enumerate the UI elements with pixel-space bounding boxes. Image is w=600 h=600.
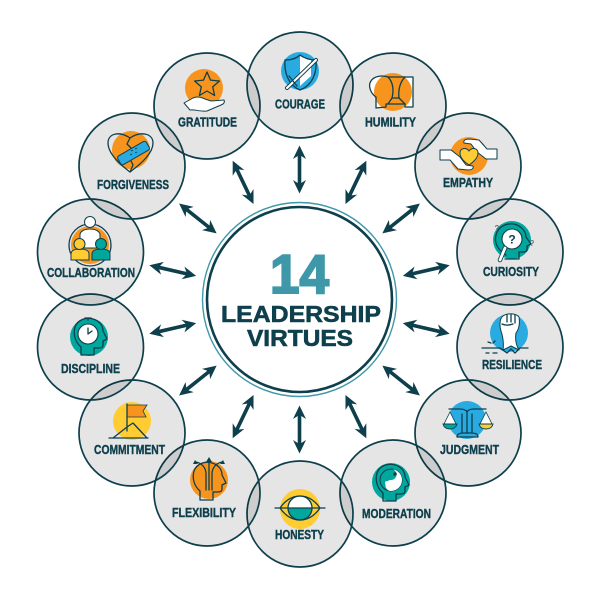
title number: 14 [270,243,329,305]
icon: raised fist from water [482,314,528,353]
icon: three people [69,216,111,266]
label: empathy: EMPATHY [443,175,493,190]
icon: hands holding heart [440,137,497,175]
panel: courage [247,32,353,138]
panel: judgment [415,380,521,486]
icon: head with yin yang [372,463,410,501]
panel: honesty [247,461,353,567]
panel: moderation [340,440,446,546]
panel: humility [340,53,446,159]
icon: star over hand [184,69,224,111]
icon: head with clock [70,318,108,356]
label: collaboration: COLLABORATION [47,265,135,280]
label: honesty: HONESTY [275,527,324,542]
icon: head with arrows [190,457,228,500]
title: leadership virtues: VIRTUES [247,325,353,351]
icon: head with magnifier: ? [495,224,500,233]
label: moderation: MODERATION [362,506,431,521]
label: forgiveness: FORGIVENESS [97,177,169,192]
panel: flexibility [154,440,260,546]
label: resilience: RESILIENCE [482,357,542,372]
icon: head with magnifier: ? [508,232,516,246]
label: judgment: JUDGMENT [440,442,499,457]
panel: resilience [457,294,563,400]
icon: head with magnifier [493,221,535,260]
icon: shield and sword [281,52,319,90]
arrows: two-way connectors [148,146,451,454]
label: discipline: DISCIPLINE [61,361,120,376]
panel: discipline [38,294,144,400]
title: leadership virtues: LEADERSHIP [221,301,381,327]
panel: forgiveness [79,113,185,219]
label: gratitude: GRATITUDE [178,114,237,130]
icon: head and trophy [370,73,413,111]
panel: curiosity [457,199,563,305]
icon: flag on mountain [109,402,151,440]
label: courage: COURAGE [275,96,325,112]
label: humility: HUMILITY [365,114,416,130]
panel: central hub [202,202,396,396]
icon: head with magnifier: ? [530,239,535,248]
icon: book scales [443,401,493,439]
label: curiosity: CURIOSITY [483,264,539,279]
panel: collaboration [38,199,144,305]
icon: eye [275,489,325,529]
label: commitment: COMMITMENT [94,442,165,457]
panel: commitment [79,380,185,486]
panel: empathy [415,113,521,219]
title: leadership virtues [221,301,381,351]
label: flexibility: FLEXIBILITY [172,505,236,520]
panel: gratitude [154,53,260,159]
icon: bandaged heart [108,131,153,172]
